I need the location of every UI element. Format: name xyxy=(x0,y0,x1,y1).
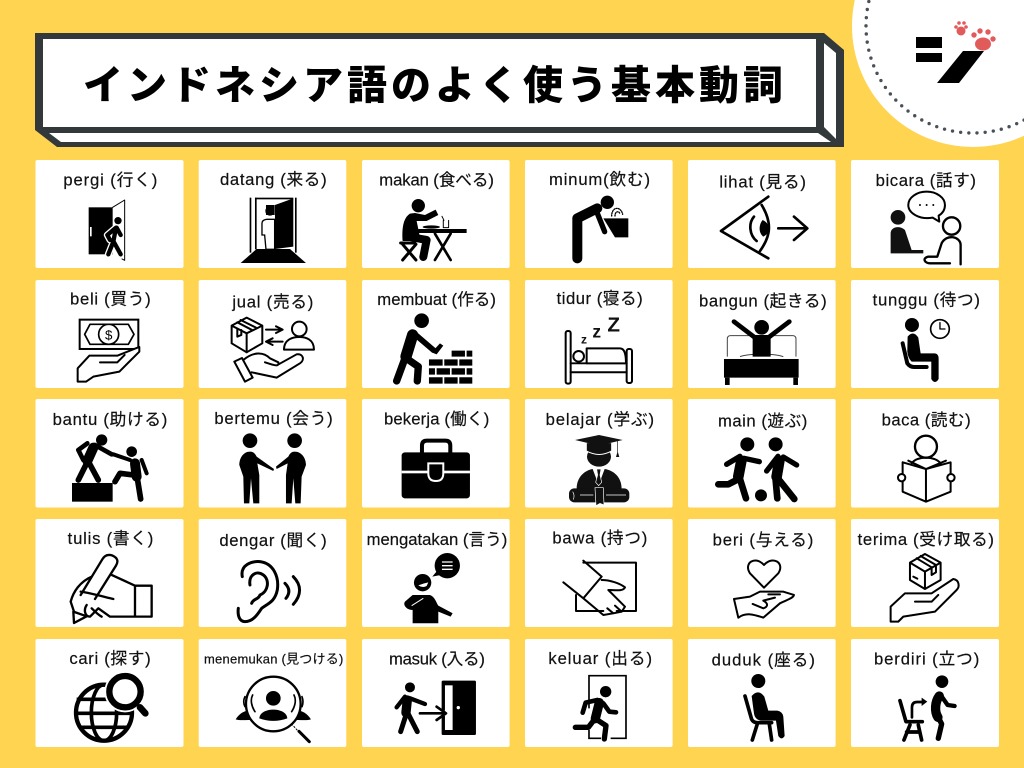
card: terima xyxy=(851,519,999,627)
label: makan: makan (食べる) xyxy=(379,171,494,190)
icon: globe with magnifying glass xyxy=(76,671,146,741)
icon: person leaving through door xyxy=(89,200,125,260)
icon: eye with arrow xyxy=(721,197,807,258)
icon: two people meeting xyxy=(239,433,306,503)
icon: briefcase xyxy=(402,441,470,498)
icon: person waiting with clock xyxy=(903,318,949,382)
icon: person sleeping in bed: z xyxy=(592,322,601,342)
card: tidur xyxy=(525,280,673,388)
label: beri: beri (与える) xyxy=(713,531,813,550)
icon: two people playing football xyxy=(718,437,797,501)
card: bangun xyxy=(688,280,836,388)
card: datang xyxy=(199,160,346,268)
icon: person sleeping in bed: z xyxy=(581,332,587,346)
icon: person eating at table xyxy=(401,199,467,260)
icon: hand writing with pen xyxy=(71,555,152,623)
label: tunggu: tunggu (待つ) xyxy=(873,291,980,310)
icon: graduate with diploma xyxy=(569,435,629,506)
label: tulis: tulis (書く) xyxy=(68,529,153,548)
card: bicara xyxy=(851,160,999,268)
card: makan xyxy=(362,160,510,268)
card: dengar xyxy=(199,519,346,627)
icon: person at drinking fountain xyxy=(577,196,628,258)
label: bicara: bicara (話す) xyxy=(876,171,976,190)
label: pergi: pergi (行く) xyxy=(63,171,157,190)
icon: hand holding banknote: $ xyxy=(105,327,113,342)
icon: person standing up from chair xyxy=(900,675,955,740)
icon: hand receiving package xyxy=(891,554,959,622)
label: jual: jual (売る) xyxy=(231,293,313,312)
label: terima: terima (受け取る) xyxy=(858,530,994,549)
card: menemukan xyxy=(199,639,346,747)
label: mengatakan: mengatakan (言う) xyxy=(367,530,507,549)
card: beri xyxy=(688,519,836,627)
label: dengar: dengar (聞く) xyxy=(219,531,327,550)
card: tunggu xyxy=(851,280,999,388)
logo badge xyxy=(852,0,1024,147)
card: cari xyxy=(36,639,184,747)
label: tidur: tidur (寝る) xyxy=(557,289,643,308)
label: datang: datang (来る) xyxy=(220,170,327,189)
label: bangun: bangun (起きる) xyxy=(699,292,827,311)
label: membuat: membuat (作る) xyxy=(377,290,496,309)
label: bantu: bantu (助ける) xyxy=(53,410,167,429)
icon: person entering door xyxy=(397,681,476,735)
card: berdiri xyxy=(851,639,999,747)
icon: person sleeping in bed: Z xyxy=(607,314,620,337)
card: bekerja xyxy=(362,399,510,508)
label: menemukan: menemukan (見つける) xyxy=(204,651,343,666)
label: main: main (遊ぶ) xyxy=(718,411,807,430)
title banner xyxy=(35,33,844,147)
label: berdiri: berdiri (立つ) xyxy=(874,650,979,669)
label: bertemu: bertemu (会う) xyxy=(214,409,333,428)
icon: person sitting on chair xyxy=(745,674,785,740)
card: masuk xyxy=(362,639,510,747)
icon: person reading book xyxy=(898,436,955,502)
icon: person waking up in bed xyxy=(724,320,799,385)
card: keluar xyxy=(525,639,673,747)
label: duduk: duduk (座る) xyxy=(712,650,815,669)
card: duduk xyxy=(688,639,836,747)
icon: two people talking xyxy=(891,192,961,264)
icon: hand carrying box xyxy=(563,561,636,615)
card: lihat xyxy=(688,160,836,268)
card: tulis xyxy=(36,519,184,627)
card: main xyxy=(688,399,836,508)
label: keluar: keluar (出る) xyxy=(548,649,652,668)
icon: person saying with speech bubble xyxy=(404,553,460,623)
card: minum xyxy=(525,160,673,268)
icon: hand offering heart xyxy=(734,560,794,618)
icon: person leaving exit door xyxy=(575,676,626,739)
icon: box, person and hand xyxy=(232,318,314,382)
card: jual xyxy=(199,280,346,388)
card: baca xyxy=(851,399,999,508)
icon: ear with sound waves xyxy=(238,562,300,622)
label: bawa: bawa (持つ) xyxy=(552,528,647,547)
label: lihat: lihat (見る) xyxy=(719,172,806,191)
icon: person sleeping in bed xyxy=(566,314,632,384)
card: bawa xyxy=(525,519,673,627)
label: masuk: masuk (入る) xyxy=(389,650,485,669)
card: mengatakan xyxy=(362,519,510,627)
label: baca: baca (読む) xyxy=(882,411,971,430)
label: minum: minum(飲む) xyxy=(549,170,650,189)
icon: person building brick wall xyxy=(397,313,472,384)
icon: person helping another climb xyxy=(72,434,147,502)
label: bekerja: bekerja (働く) xyxy=(384,409,489,428)
card: membuat xyxy=(362,280,510,388)
card: bantu xyxy=(36,399,184,508)
icon: hand holding banknote xyxy=(78,320,139,382)
label: cari: cari (探す) xyxy=(69,649,151,668)
card: pergi xyxy=(36,160,184,268)
label: beli: beli (買う) xyxy=(70,289,151,308)
label: belajar: belajar (学ぶ) xyxy=(546,410,654,429)
card: bertemu xyxy=(199,399,346,508)
title: インドネシア語のよく使う基本動詞 xyxy=(83,53,783,111)
icon: person arriving at doorway xyxy=(241,198,306,263)
card: beli xyxy=(36,280,184,388)
card: belajar xyxy=(525,399,673,508)
icon: magnifier finding person xyxy=(236,677,311,742)
